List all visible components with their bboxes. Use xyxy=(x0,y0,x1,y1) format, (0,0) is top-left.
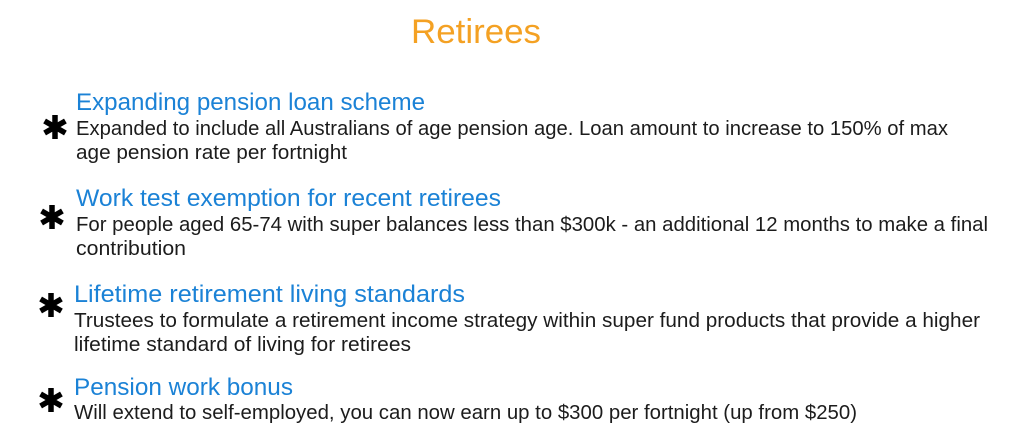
title: Retirees xyxy=(411,13,541,51)
body text: lifetime retirement living standards: Trustees to formulate a retirement income strategy within super fund products that provide a higher xyxy=(74,310,980,332)
body text: work test exemption xyxy=(76,214,988,260)
heading: work test exemption: Work test exemption for recent retirees xyxy=(76,185,501,212)
heading: lifetime retirement living standards: Lifetime retirement living standards xyxy=(74,281,465,308)
body text: expanding pension loan scheme xyxy=(76,118,948,164)
item: pension work bonus xyxy=(41,374,857,424)
item: lifetime retirement living standards xyxy=(41,281,980,356)
icon: asterisk 1 xyxy=(45,115,65,139)
body text: expanding pension loan scheme: Expanded to include all Australians of age pension age. Loan amount to increase to 150% of max xyxy=(76,118,948,140)
body text: lifetime retirement living standards xyxy=(74,310,980,356)
item: work test exemption xyxy=(42,185,988,260)
body text: expanding pension loan scheme: age pension rate per fortnight xyxy=(76,142,347,164)
icon: asterisk 3 xyxy=(41,293,61,317)
body text: lifetime retirement living standards: lifetime standard of living for retirees xyxy=(74,334,411,356)
item: expanding pension loan scheme xyxy=(45,89,948,164)
body text: work test exemption: contribution xyxy=(76,238,186,260)
icon: asterisk 2 xyxy=(42,205,62,229)
body text: work test exemption: For people aged 65-74 with super balances less than $300k - an additional 12 months to make a final xyxy=(76,214,988,236)
heading: expanding pension loan scheme: Expanding pension loan scheme xyxy=(76,89,425,116)
icon: asterisk 4 xyxy=(41,388,61,412)
heading: pension work bonus: Pension work bonus xyxy=(74,374,293,401)
body text: pension work bonus: Will extend to self-employed, you can now earn up to $300 per fortnight (up from $250) xyxy=(74,402,857,424)
